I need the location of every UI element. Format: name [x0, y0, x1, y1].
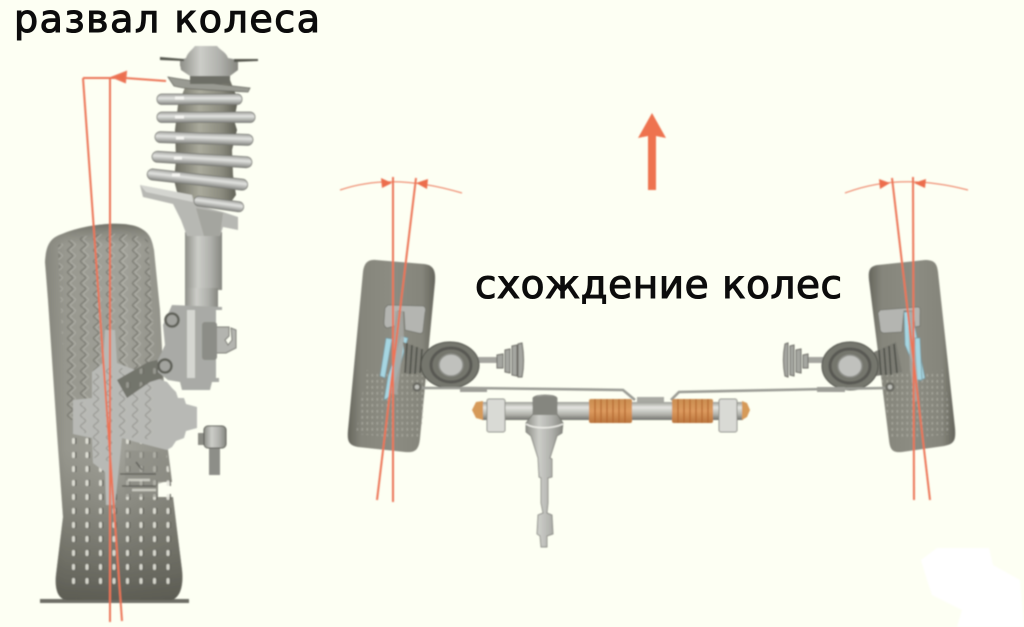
white patch lower right [921, 548, 1024, 627]
brake hub and boot [73, 330, 197, 505]
strut knuckle bracket [158, 305, 236, 390]
tie rod end [198, 426, 226, 475]
front-right wheel [869, 260, 955, 452]
left drive joint with boots [403, 342, 524, 388]
tie rods [414, 384, 894, 400]
toe lines, arcs and arrows [340, 177, 968, 502]
coil spring [147, 94, 255, 212]
strut tube [185, 232, 222, 308]
diagram: toe-in top view [340, 177, 968, 547]
steering column and pinion [526, 395, 563, 547]
left wheel side view [45, 224, 182, 600]
steering rack [472, 399, 750, 432]
ground line [40, 599, 189, 603]
bump stop behind spring [174, 80, 238, 206]
camber angle lines and arrow [83, 72, 166, 622]
heading: схождение колес: схождение колес [475, 263, 842, 308]
front-left wheel [348, 260, 435, 452]
top mount [160, 46, 258, 92]
up direction arrow [638, 113, 666, 190]
right drive joint with boots [784, 342, 902, 390]
diagram: wheel camber with strut [40, 46, 258, 622]
spring seat and lower strut cup [140, 185, 238, 236]
